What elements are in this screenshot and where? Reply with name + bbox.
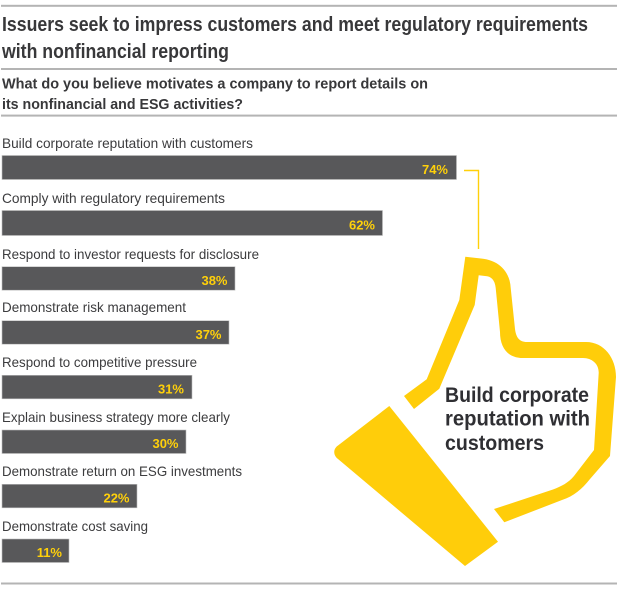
bar: demonstrate return on ESG [2,463,242,508]
bar: demonstrate cost saving: Demonstrate cost saving [2,518,148,534]
callout: Build corporate [445,384,589,407]
survey question: What do you believe motivates a company to report details on [2,76,428,92]
bar: comply with regulatory requirements [2,190,382,236]
thumb outline [404,257,616,522]
bar: build corporate reputation: Build corporate reputation with customers [2,135,253,151]
connector line [464,170,478,249]
title: with nonfinancial reporting [1,41,229,63]
bar: respond to investor requests [2,246,259,290]
bar: comply with regulatory requirements: Comply with regulatory requirements [2,190,225,206]
bar: demonstrate risk management: Demonstrate risk management [2,299,186,315]
callout [445,384,590,455]
survey question [2,76,428,113]
bar: build corporate reputation: 74% [422,162,448,177]
bar: respond to competitive pressure: Respond to competitive pressure [2,354,197,370]
bar: comply with regulatory requirements: 62% [349,218,375,232]
title [1,14,588,63]
icon: thumbs up [334,257,616,566]
bar: demonstrate risk management: 37% [195,327,222,342]
bar: explain business strategy [2,409,230,454]
bar: demonstrate cost saving [2,518,148,562]
bar: demonstrate return on ESG: Demonstrate return on ESG investments [2,463,242,479]
bar: demonstrate cost saving: 11% [37,545,62,560]
bar: respond to investor requests: Respond to investor requests for disclosure [2,246,259,262]
bar: demonstrate return on ESG: 22% [103,490,130,506]
bar: respond to competitive pressure: 31% [158,382,184,396]
bar: build corporate reputation [2,135,456,180]
callout: customers [445,432,544,455]
callout: reputation with [445,408,590,430]
bar: explain business strategy: 30% [152,436,179,451]
bar: demonstrate risk management [2,299,229,344]
cuff [334,406,498,566]
survey question: its nonfinancial and ESG activities? [2,96,243,113]
bar: respond to competitive pressure [2,354,197,399]
bar: explain business strategy: Explain business strategy more clearly [2,409,230,425]
bar chart [2,135,456,562]
bar: respond to investor requests: 38% [201,273,228,288]
